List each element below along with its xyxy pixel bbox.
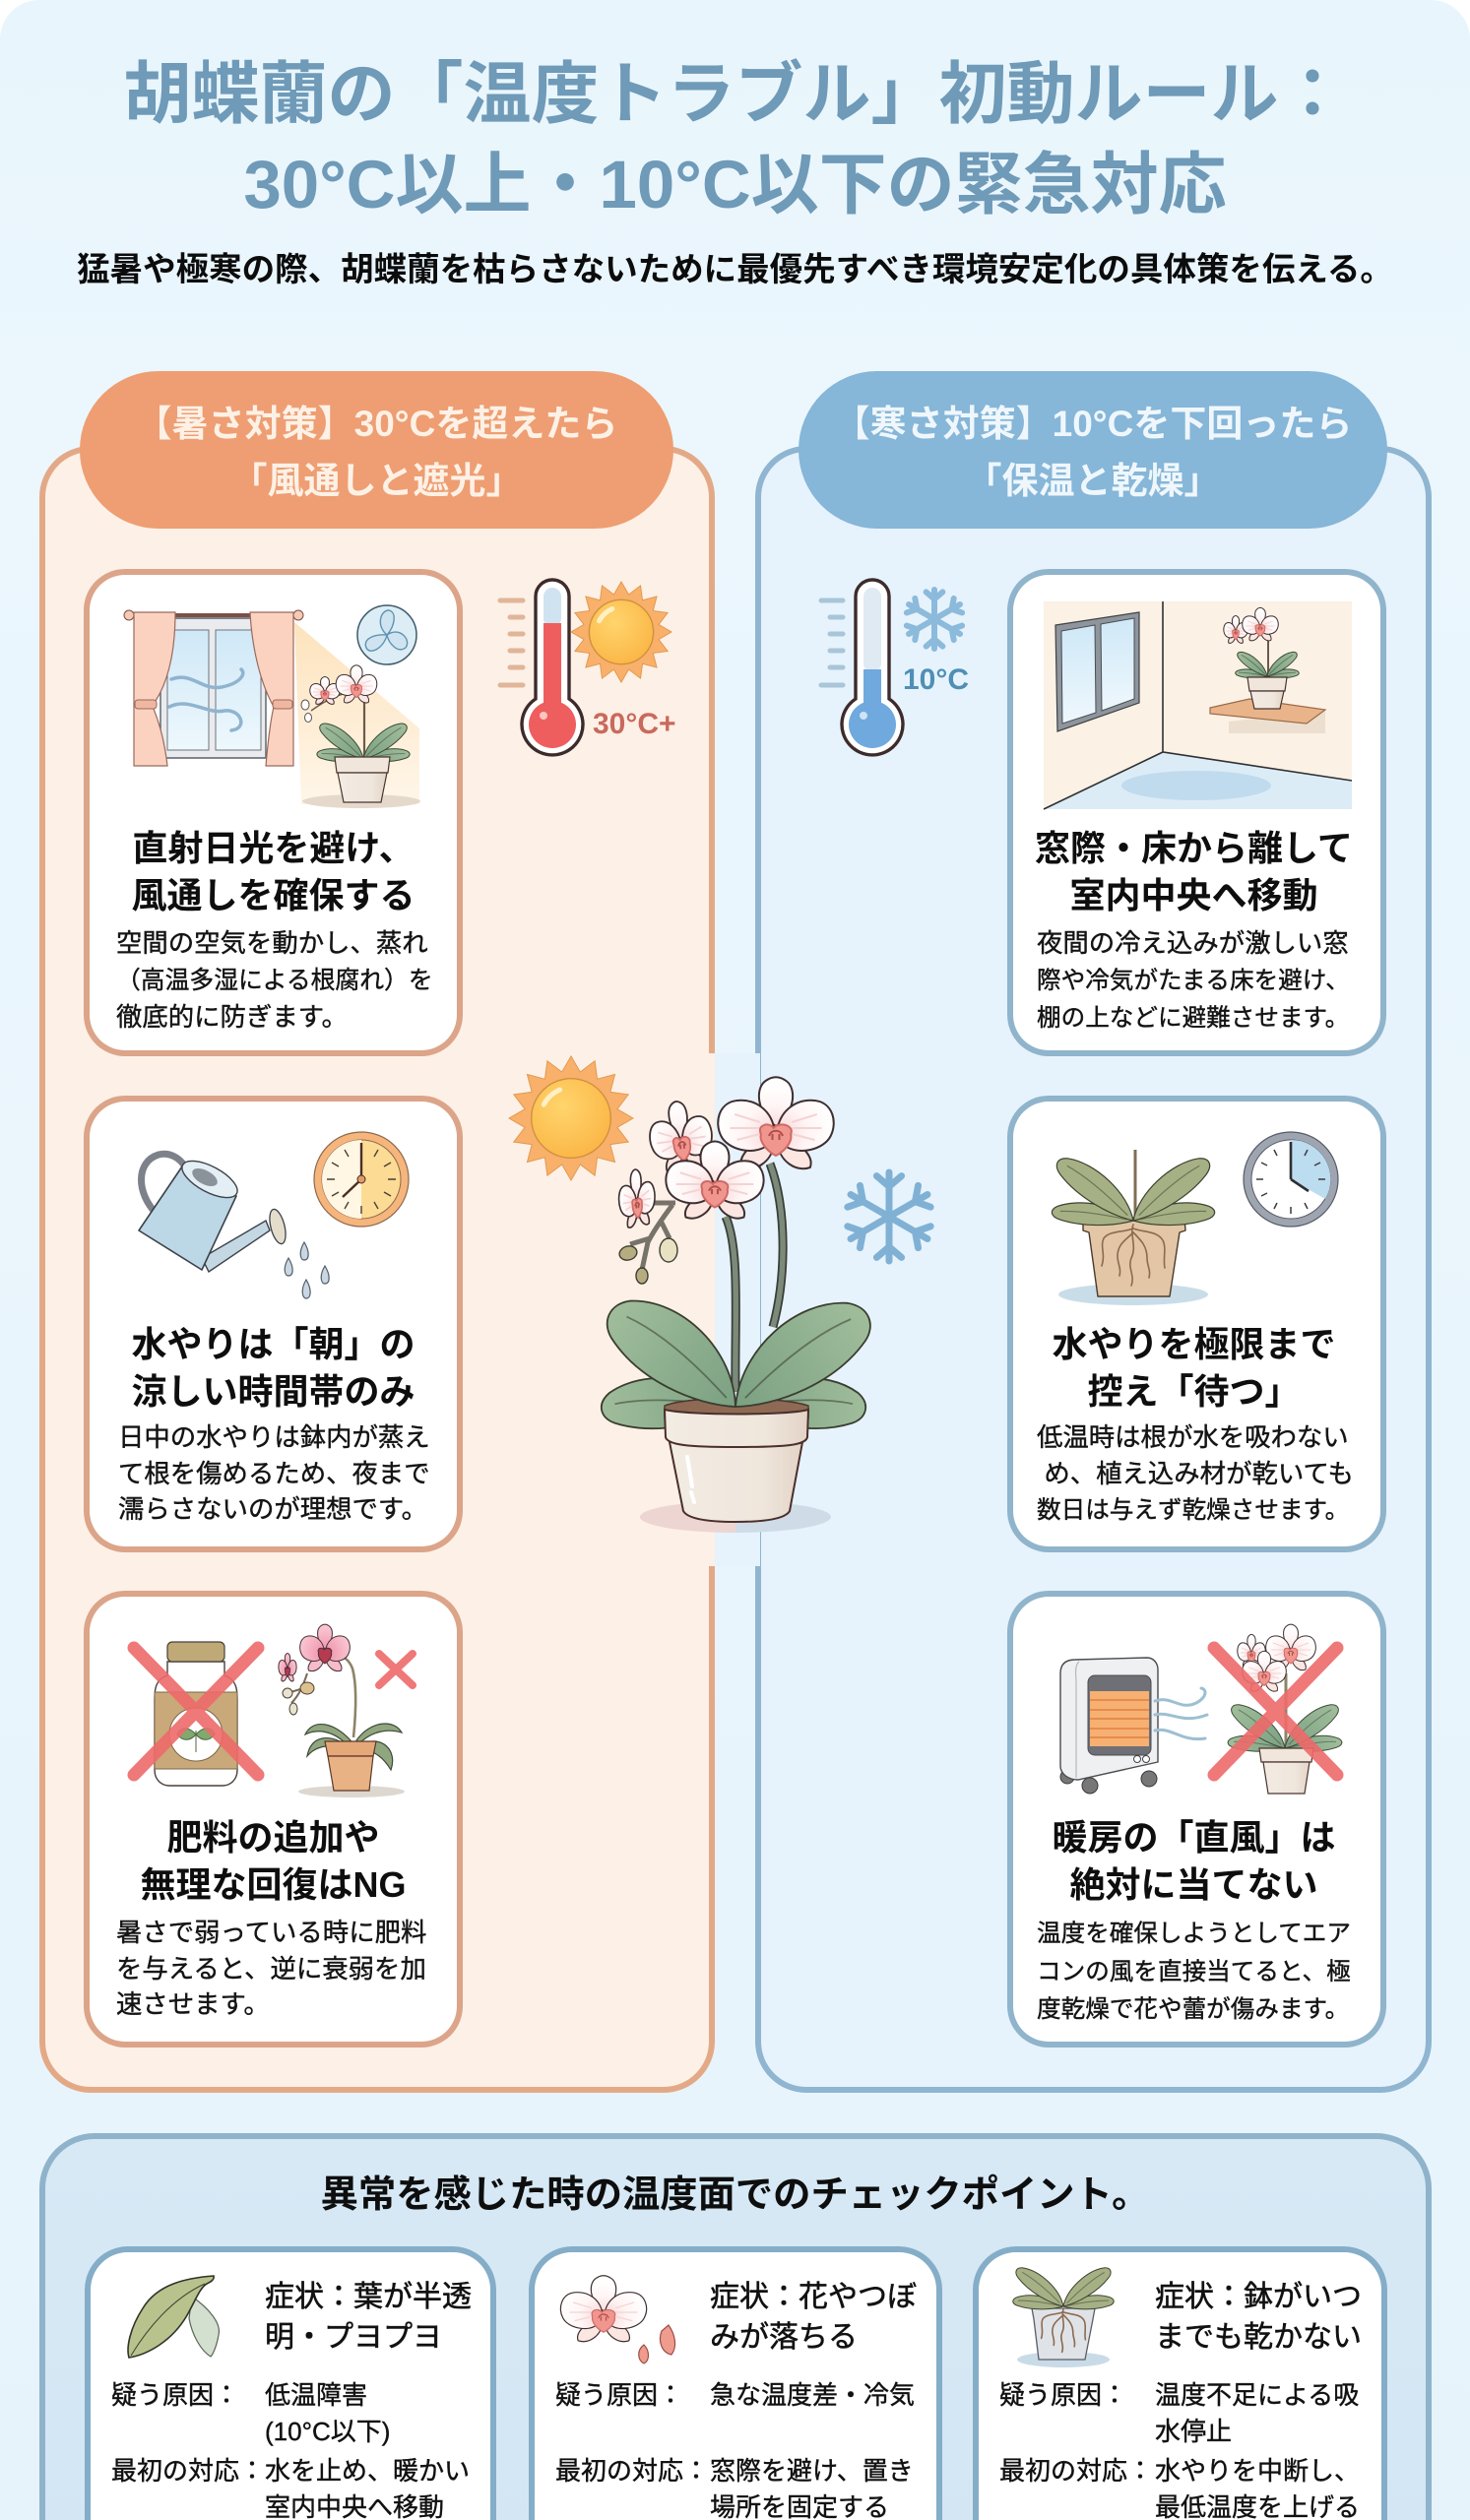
subtitle: 猛暑や極寒の際、胡蝶蘭を枯らさないために最優先すべき環境安定化の具体策を伝える。 bbox=[77, 252, 1393, 288]
card body text: コンの風を直接当てると、極 bbox=[1037, 1959, 1351, 1984]
card heading: 風通しを確保する bbox=[131, 875, 415, 915]
symptom: 明・プヨプヨ bbox=[265, 2321, 442, 2354]
card body text: を与えると、逆に衰弱を加 bbox=[116, 1953, 426, 1983]
icon: pot with roots and clock bbox=[1052, 1131, 1339, 1305]
symptom: までも乾かない bbox=[1155, 2321, 1362, 2354]
icon: sun bbox=[509, 1056, 633, 1180]
symptom bbox=[265, 2281, 472, 2354]
card body text: 濡らさないのが理想です。 bbox=[118, 1494, 427, 1524]
title: 30°C以上・10°C以下の緊急対応 bbox=[243, 147, 1227, 222]
cause detail: 温度不足による吸 bbox=[1155, 2380, 1359, 2410]
action detail: 水やりを中断し、 bbox=[1155, 2456, 1360, 2486]
cause detail: 水停止 bbox=[1155, 2417, 1232, 2446]
cause detail bbox=[265, 2380, 390, 2446]
card body text bbox=[118, 1422, 430, 1524]
card body text bbox=[1037, 928, 1350, 1032]
cause: 疑う原因： bbox=[111, 2380, 239, 2410]
check card: translucent leaves bbox=[85, 2246, 496, 2520]
card body text: （高温多湿による根腐れ）を bbox=[116, 967, 433, 994]
heading pill: cold bbox=[799, 371, 1387, 529]
heading pill: heat: 【暑さ対策】30°Cを超えたら bbox=[136, 404, 617, 444]
card: water in the morning bbox=[84, 1096, 463, 1552]
card heading: 直射日光を避け、 bbox=[132, 828, 415, 868]
action detail bbox=[265, 2456, 470, 2520]
panel: symptom checklist bbox=[39, 2133, 1432, 2520]
centre band joining both panels bbox=[709, 1053, 760, 1566]
icon: damaged leaf bbox=[127, 2275, 220, 2359]
card body text: 度乾燥で花や蕾が傷みます。 bbox=[1037, 1996, 1349, 2023]
card heading bbox=[1052, 1817, 1335, 1905]
card body text bbox=[116, 1918, 426, 2019]
card heading: 水やりは「朝」の bbox=[131, 1324, 415, 1364]
card body text: 温度を確保しようとしてエア bbox=[1037, 1921, 1351, 1947]
temperature label: 30°C+ bbox=[593, 708, 676, 740]
symptom bbox=[1155, 2281, 1362, 2354]
symptom: 症状：鉢がいつ bbox=[1155, 2281, 1362, 2313]
card heading bbox=[140, 1817, 406, 1905]
icon: heater and crossed orchid bbox=[1059, 1624, 1343, 1795]
card heading bbox=[1035, 828, 1353, 915]
card heading: 室内中央へ移動 bbox=[1069, 875, 1317, 915]
symptom: みが落ちる bbox=[710, 2321, 858, 2354]
card body text: め、植え込み材が乾いても bbox=[1044, 1459, 1354, 1488]
title: 胡蝶蘭の「温度トラブル」初動ルール： bbox=[124, 56, 1347, 132]
first action: 最初の対応： bbox=[555, 2456, 709, 2486]
card body text bbox=[1037, 1422, 1354, 1524]
cause: 疑う原因： bbox=[555, 2380, 683, 2410]
card body text: 夜間の冷え込みが激しい窓 bbox=[1037, 928, 1349, 958]
card body text: 棚の上などに避難させます。 bbox=[1037, 1005, 1349, 1032]
first action: 最初の対応： bbox=[111, 2456, 265, 2486]
icon: room with shelf bbox=[1044, 601, 1353, 810]
action detail: 水を止め、暖かい bbox=[265, 2456, 470, 2486]
card heading: 絶対に当てない bbox=[1069, 1864, 1317, 1905]
icon: heat thermometer with sun bbox=[498, 578, 676, 757]
card heading bbox=[1052, 1324, 1335, 1412]
icon: window, fan and orchid bbox=[124, 604, 420, 808]
icon: watering can and clock bbox=[138, 1131, 410, 1299]
card heading: 肥料の追加や bbox=[166, 1817, 380, 1858]
card: move away from window bbox=[1007, 569, 1386, 1056]
panel: cold measures background bbox=[755, 446, 1432, 2093]
temperature label: 10°C bbox=[903, 663, 969, 696]
cause: 疑う原因： bbox=[999, 2380, 1127, 2410]
card: no direct heater wind bbox=[1007, 1591, 1386, 2048]
card heading bbox=[131, 828, 415, 915]
card body text: 数日は与えず乾燥させます。 bbox=[1037, 1497, 1349, 1524]
card heading bbox=[131, 1324, 415, 1412]
check card: flowers dropping bbox=[529, 2246, 942, 2520]
card heading: 水やりを極限まで bbox=[1052, 1324, 1335, 1364]
card body text: 低温時は根が水を吸わない bbox=[1037, 1422, 1349, 1452]
card heading: 控え「待つ」 bbox=[1087, 1371, 1300, 1412]
panel: heat measures background bbox=[39, 446, 715, 2093]
cause detail: 急な温度差・冷気 bbox=[710, 2380, 915, 2410]
icon: flower and fallen buds bbox=[559, 2275, 675, 2364]
symptom bbox=[710, 2281, 917, 2354]
card heading: 無理な回復はNG bbox=[140, 1864, 406, 1905]
card body text: て根を傷めるため、夜まで bbox=[118, 1459, 430, 1488]
card: avoid direct sunlight bbox=[84, 569, 463, 1056]
orchid plant bbox=[594, 1077, 883, 1533]
checklist heading: 異常を感じた時の温度面でのチェックポイント。 bbox=[321, 2174, 1149, 2216]
cause detail: 低温障害 bbox=[265, 2380, 367, 2410]
icon: crossed fertilizer bottle and weak orchid bbox=[128, 1624, 416, 1797]
symptom: 症状：花やつぼ bbox=[710, 2281, 917, 2313]
card: hold back water bbox=[1007, 1096, 1386, 1552]
icon: cold thermometer with snowflake bbox=[819, 578, 969, 757]
heading pill: heat bbox=[80, 371, 673, 529]
cause detail bbox=[1155, 2380, 1359, 2446]
card body text: 空間の空気を動かし、蒸れ bbox=[116, 928, 428, 958]
card body text: 暑さで弱っている時に肥料 bbox=[116, 1918, 426, 1947]
heading pill: cold: 【寒さ対策】10°Cを下回ったら bbox=[834, 404, 1352, 444]
title bbox=[124, 56, 1347, 222]
card body text: 速させます。 bbox=[116, 1989, 270, 2019]
card body text: 際や冷気がたまる床を避け、 bbox=[1037, 967, 1350, 994]
card body text: 日中の水やりは鉢内が蒸え bbox=[118, 1422, 430, 1452]
card heading: 暖房の「直風」は bbox=[1052, 1817, 1335, 1858]
heading pill: cold: 「保温と乾燥」 bbox=[965, 461, 1221, 501]
card heading: 涼しい時間帯のみ bbox=[131, 1371, 415, 1412]
first action: 最初の対応： bbox=[999, 2456, 1153, 2486]
check card: pot stays wet bbox=[973, 2246, 1387, 2520]
symptom: 症状：葉が半透 bbox=[265, 2281, 472, 2313]
action detail bbox=[1155, 2456, 1360, 2520]
card: no fertilizer bbox=[84, 1591, 463, 2048]
cause detail: (10°C以下) bbox=[265, 2417, 390, 2446]
card body text bbox=[1037, 1921, 1351, 2023]
action detail bbox=[710, 2456, 914, 2520]
heading pill: heat: 「風通しと遮光」 bbox=[230, 461, 522, 501]
card heading: 窓際・床から離して bbox=[1035, 828, 1353, 868]
central illustration: orchid with sun and snowflake bbox=[508, 1055, 934, 1533]
icon: clear pot with roots bbox=[1012, 2267, 1115, 2367]
icon: snowflake bbox=[845, 1172, 933, 1261]
action detail: 窓際を避け、置き bbox=[710, 2456, 914, 2486]
card body text: 徹底的に防ぎます。 bbox=[116, 1002, 348, 1032]
card body text bbox=[116, 928, 433, 1032]
